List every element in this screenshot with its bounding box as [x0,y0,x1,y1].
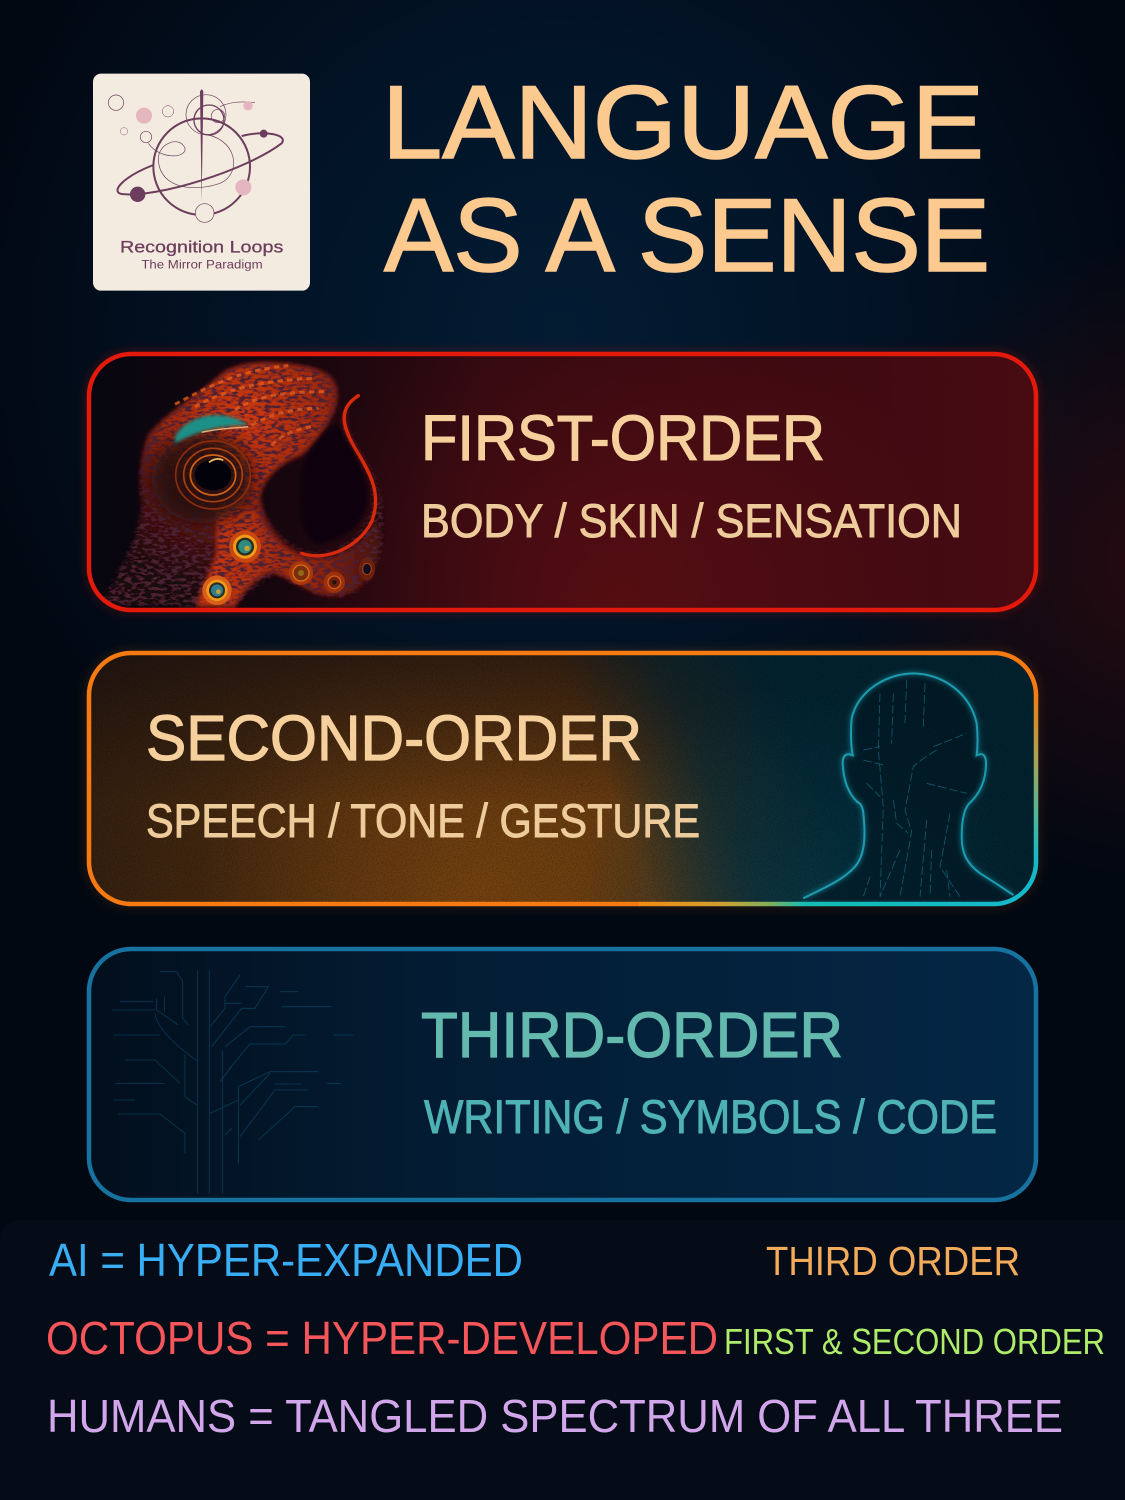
first-order subheading: BODY / SKIN / SENSATION [421,494,962,547]
octopus arm base [197,506,381,607]
first-order heading: FIRST-ORDER [421,402,825,474]
title line 2: AS A SENSE [384,178,990,294]
legend: third order tag: THIRD ORDER [766,1238,1020,1284]
legend: humans: HUMANS = TANGLED SPECTRUM OF ALL THREE [47,1390,1063,1442]
suckers [202,531,375,605]
second-order gradient border [89,653,1036,904]
third-order heading: THIRD-ORDER [421,999,843,1071]
circuit tree illustration [112,970,353,1193]
second-order subheading: SPEECH / TONE / GESTURE [146,794,700,847]
logo subtitle: The Mirror Paradigm [141,258,263,272]
logo: orbit illustration [108,89,283,222]
eye [176,441,250,509]
title line 1: LANGUAGE [382,65,984,181]
shadow around eye [152,433,252,523]
hollow between head and arm [301,425,368,543]
head top streaks [175,366,328,445]
legend [46,1234,1105,1442]
panel: third-order [89,949,1036,1200]
arm inner edge [302,396,376,556]
panel: second-order [89,653,1036,904]
teal brow [175,415,248,443]
legend: AI: AI = HYPER-EXPANDED [49,1234,523,1286]
bottom legend backing band [0,1220,1125,1500]
logo title: Recognition Loops [120,238,283,257]
third-order subheading: WRITING / SYMBOLS / CODE [424,1090,997,1143]
panel: first-order [89,354,1036,610]
main title [382,65,990,294]
second-order heading: SECOND-ORDER [146,702,642,774]
octopus illustration [98,363,383,607]
logo card [93,74,310,291]
legend: octopus: OCTOPUS = HYPER-DEVELOPED [46,1312,718,1364]
glowing head silhouette [803,673,1013,900]
